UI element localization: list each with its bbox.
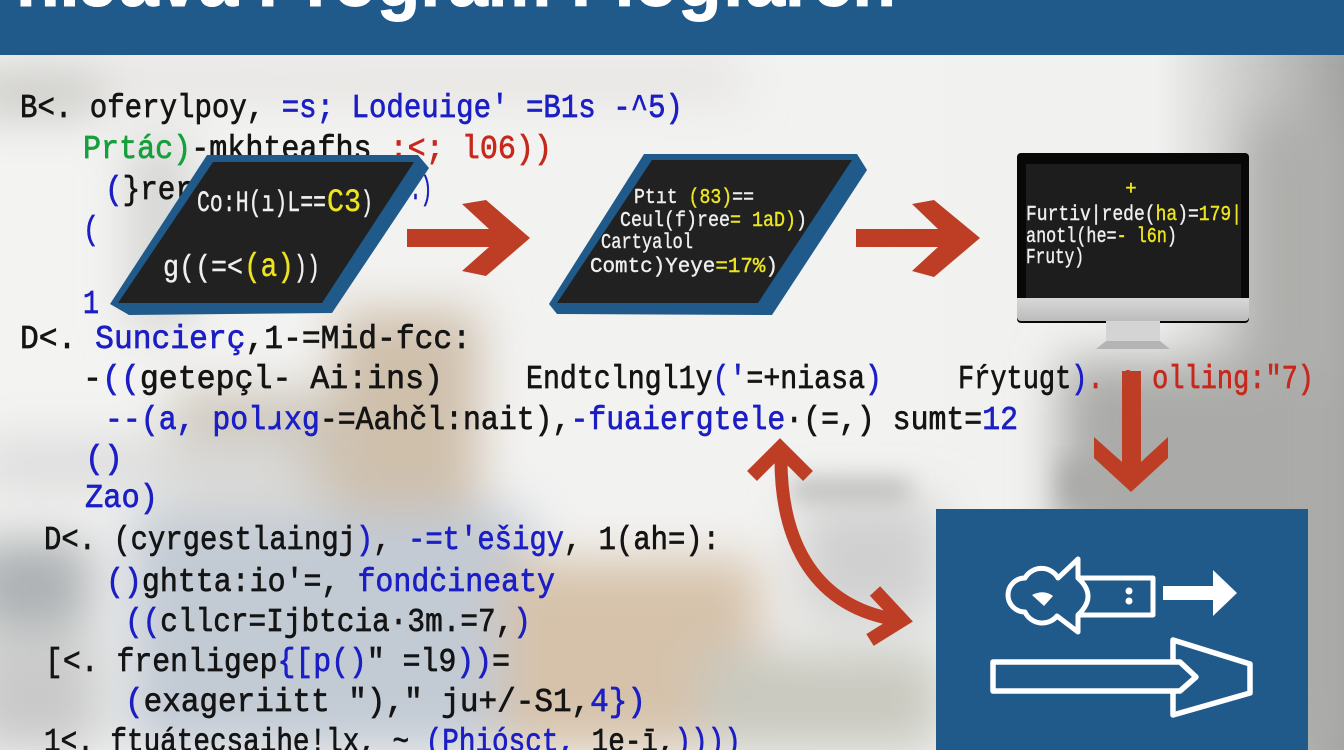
- panel: source code slate: ): [361, 187, 373, 221]
- icon: monitor with output: Fruty): [1026, 247, 1084, 270]
- panel: source code slate: C3: [327, 184, 361, 221]
- icon: monitor with output: anotl(he=- l6n): [1026, 226, 1177, 249]
- panel: bytecode slate: Comtc)Yeye=17%): [590, 256, 778, 279]
- code block: upper listing: [20, 90, 683, 323]
- panel: source code slate: g((=<: [163, 251, 243, 286]
- code block: lower listing: D<. (cyrgestlaingj), -=t'ešigy, 1(ah=):: [44, 522, 720, 559]
- arrow: output down to JVM box: [1094, 371, 1168, 492]
- panel: bytecode slate: Ceul(f)ree= 1aD)): [620, 210, 807, 233]
- icon: monitor with output: +: [1125, 178, 1137, 200]
- panel: execution box: [936, 509, 1308, 750]
- code block: upper listing: 1: [83, 286, 99, 323]
- code block: middle listing: Zao): [85, 480, 158, 517]
- panel: source code slate: [110, 155, 429, 315]
- code block: lower listing: (exageriitt ")," ju+/-S1,4}): [125, 684, 646, 721]
- icon: small marks on plug: [1032, 588, 1132, 606]
- code block: upper listing: (}rer: [105, 172, 193, 209]
- code block: lower listing: ((cllcr=Ijbtcia·3m.=7,): [125, 604, 531, 641]
- code block: lower listing: ()ghtta:io'=, fondċineaty: [106, 564, 555, 601]
- code block: lower listing: [<. frenligep{[p()" =l9))=: [45, 644, 510, 681]
- code block: middle listing: (): [85, 441, 123, 478]
- icon: cloud and plug: [1008, 559, 1153, 632]
- arrow: curved two-way feedback: [752, 448, 902, 640]
- panel: source code slate: )): [294, 251, 320, 286]
- code block: middle listing: -((getepçl- Ai:ins): [83, 361, 443, 398]
- code block: upper listing: B<. oferylpoy, =s; Lodeuige' =B1s -^5): [20, 90, 683, 127]
- icon: solid white arrow: [1163, 570, 1237, 616]
- code block: upper listing: Prtác)-mkhteafhs :<; l06)): [83, 131, 552, 168]
- code block: upper listing: (: [83, 212, 99, 249]
- code block: upper listing: .): [410, 172, 432, 209]
- code block: middle listing: D<. Suncierç,1-=Mid-fcc:: [20, 321, 471, 358]
- arrow: slate to bytecode: [407, 200, 530, 276]
- icon: monitor with output: [1017, 153, 1249, 349]
- panel: source code slate: Co:H(ı)L==: [197, 187, 326, 221]
- panel: source code slate: (a): [244, 249, 294, 286]
- panel: bytecode slate: Ptıt (83)==: [634, 187, 754, 210]
- arrow: bytecode to output: [856, 200, 980, 277]
- icon: monitor with output: Furtiv|rede(ha)=179|: [1026, 204, 1242, 227]
- icon: outlined long arrow: [993, 640, 1250, 715]
- header bar: [0, 0, 1344, 55]
- panel: bytecode slate: Cartyalol: [601, 232, 693, 255]
- code block: lower listing: [44, 522, 741, 750]
- code block: middle listing: --(a, polɹxg-=Aahčl:nait),-fuaiergtele·(=,) sumt=12: [105, 402, 1018, 439]
- code block: middle listing: Endtclngl1y('=+niasa): [526, 361, 882, 398]
- panel: bytecode slate: [549, 154, 867, 315]
- code block: middle listing: [20, 321, 1314, 517]
